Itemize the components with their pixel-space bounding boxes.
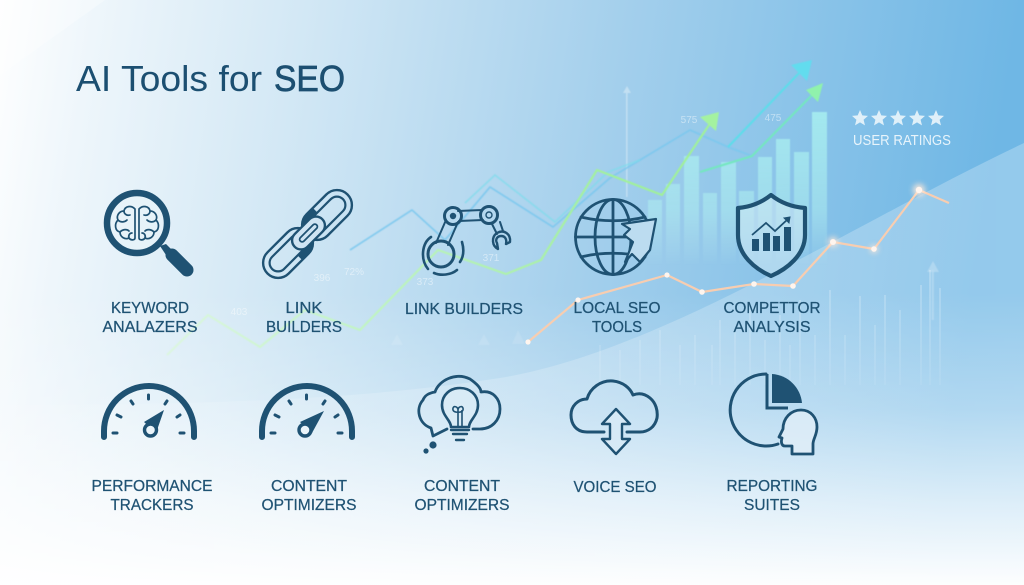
label: ANALAZERS (102, 319, 198, 336)
background chart: thin lower bars (600, 270, 940, 385)
title: SEO (274, 58, 345, 99)
label: REPORTING (726, 478, 818, 495)
label: KEYWORD (111, 300, 189, 317)
tool: link builders robot arm (405, 206, 523, 318)
label: ANALYSIS (734, 319, 810, 336)
background chart: cyan arrow (728, 60, 812, 147)
tool: reporting suites (726, 374, 818, 514)
label: SUITES (744, 497, 800, 514)
icon: chain links (257, 184, 358, 284)
label: COMPETTOR (724, 300, 820, 317)
label: LOCAL SEO (574, 300, 660, 317)
icon: pie chart with head (730, 374, 817, 454)
background chart: number labels: 403 (231, 307, 248, 318)
tool: competitor analysis (724, 195, 820, 336)
label: LINK BUILDERS (405, 301, 523, 318)
tool: local seo tools (574, 200, 660, 336)
background chart: cyan line (465, 160, 640, 222)
background chart: number labels: 373 (417, 277, 434, 288)
tool: link builders (257, 184, 358, 336)
background chart: teal-green arrow (700, 83, 823, 172)
tool: performance trackers (92, 386, 212, 514)
label: TRACKERS (110, 497, 194, 514)
background chart: green line (167, 112, 719, 355)
icon: robot arm (423, 206, 510, 275)
icon: globe with arrow (576, 200, 656, 274)
background chart: blue line (350, 130, 752, 250)
tool: content optimizers gauge (262, 386, 356, 514)
background chart: number labels (231, 113, 782, 318)
label: OPTIMIZERS (414, 497, 510, 514)
background chart: faint axis arrows (391, 86, 939, 345)
label: LINK (286, 300, 323, 317)
tool: content optimizers bulb (414, 376, 510, 514)
background chart: orange line (525, 184, 949, 345)
background chart: number labels: 72% (344, 267, 364, 278)
icon: gauge (262, 386, 352, 437)
label: BUILDERS (266, 319, 342, 336)
label: TOOLS (592, 319, 642, 336)
title: AI Tools for (76, 58, 262, 99)
tool: keyword analyzers (102, 193, 198, 336)
icon: shield with chart (738, 195, 805, 276)
icon: gauge (104, 386, 194, 437)
tool: voice seo (571, 381, 657, 496)
title (76, 58, 345, 99)
label: CONTENT (271, 478, 347, 495)
background chart: number labels: 371 (483, 253, 500, 264)
background chart: number labels: 475 (765, 113, 782, 124)
icon: thought cloud with bulb (419, 376, 500, 454)
background chart: number labels: 575 (681, 115, 698, 126)
label: VOICE SEO (574, 479, 656, 496)
label: OPTIMIZERS (262, 497, 356, 514)
icon: five stars (852, 110, 944, 125)
user ratings (852, 110, 951, 149)
background chart: bars (648, 112, 827, 265)
icon: cloud with up-down arrow (571, 381, 657, 454)
label: PERFORMANCE (92, 478, 212, 495)
label: CONTENT (424, 478, 500, 495)
background chart: number labels: 396 (314, 273, 331, 284)
rating caption: USER RATINGS (853, 133, 951, 149)
icon: magnifier with brain (107, 193, 187, 270)
